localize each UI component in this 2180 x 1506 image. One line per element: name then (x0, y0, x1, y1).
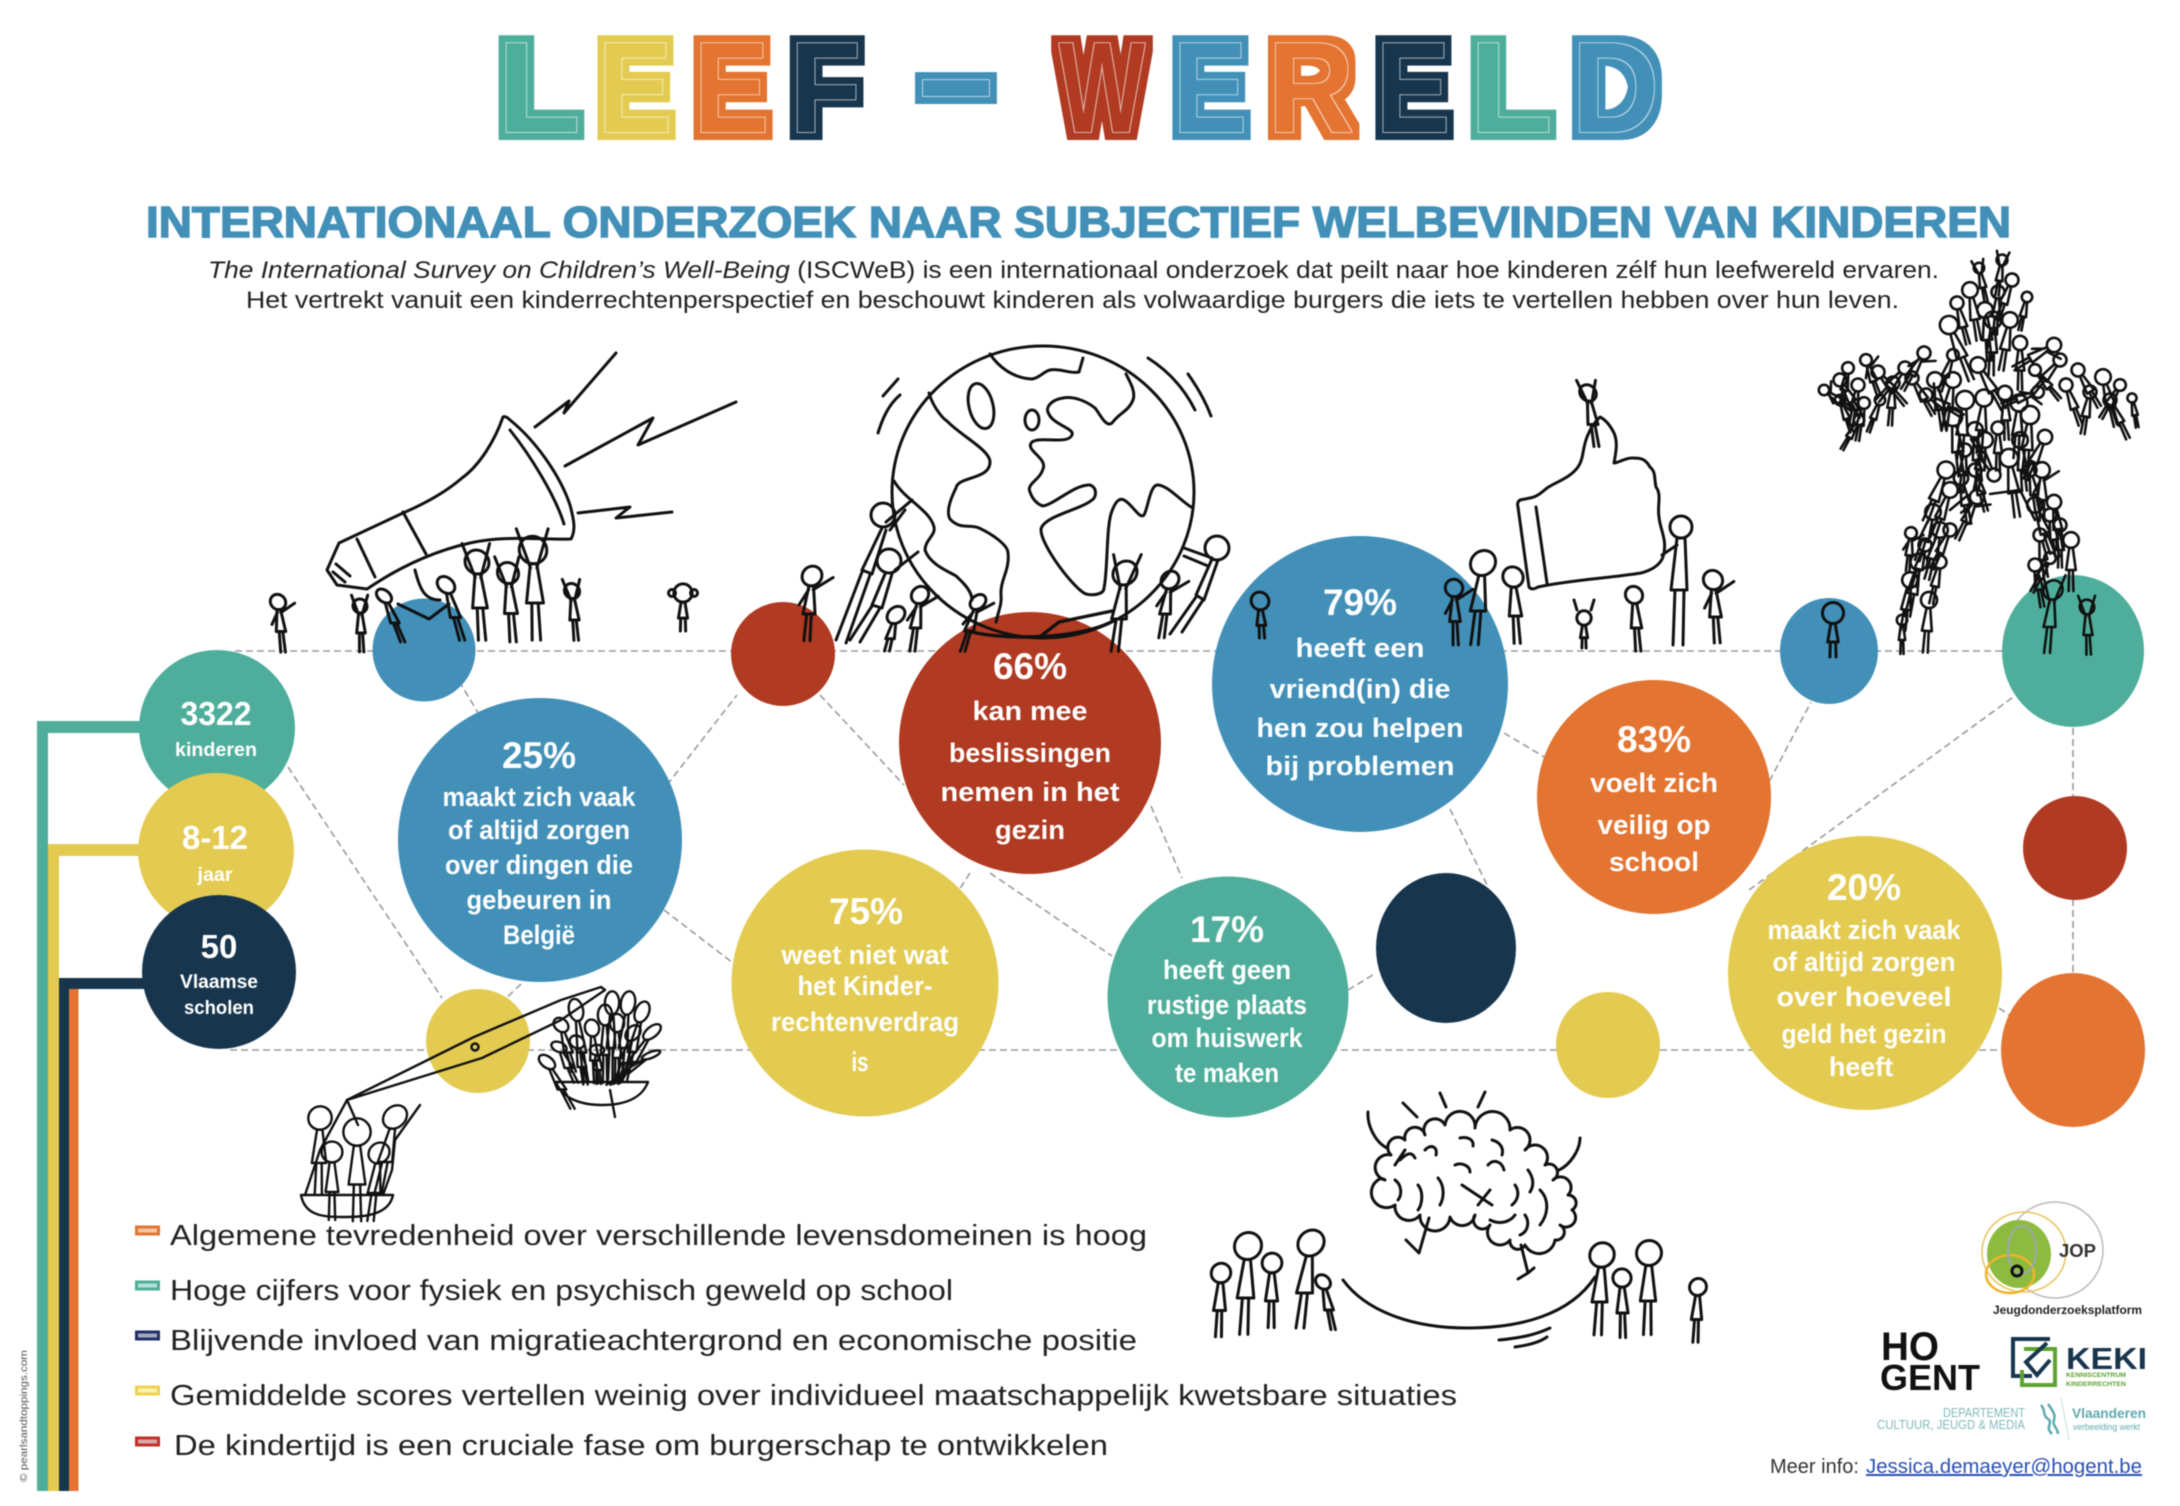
circle: 50 Vlaamse scholen: scholen (184, 998, 254, 1019)
circle: 3322 kinderen: 3322 (180, 695, 252, 732)
stat: 75%: weet niet wat (781, 940, 948, 970)
logo: Departement Cultuur Jeugd en Media: DEPARTEMENT (1943, 1405, 2025, 1420)
stat: 17% (1108, 876, 1348, 1118)
stat: 25%: of altijd zorgen (448, 815, 630, 845)
stat: 75%: rechtenverdrag (771, 1007, 959, 1037)
circle: 8-12 jaar: 8-12 (182, 819, 248, 856)
stat: 75% (732, 850, 998, 1116)
stat: 79%: bij problemen (1266, 751, 1454, 781)
stat: 17%: heeft geen (1163, 955, 1291, 985)
plain decorative dots (372, 575, 2145, 1127)
contact line: Jessica.demaeyer@hogent.be (1866, 1456, 2142, 1478)
illustration: megaphone with children (269, 353, 736, 652)
illustration: giant figure made of children (1817, 251, 2142, 655)
logo: KEKI: KINDERRECHTEN (2066, 1382, 2126, 1388)
stat: 25%: België (503, 920, 575, 950)
stat: 25% (398, 698, 682, 982)
stat: 17%: te maken (1175, 1058, 1279, 1088)
logo: KEKI (2013, 1339, 2147, 1388)
logo: Vlaanderen: Vlaanderen (2072, 1405, 2146, 1421)
logo: JOP: Jeugdonderzoeksplatform (1993, 1303, 2142, 1317)
title: E (1173, 16, 1247, 160)
stat: 66%: gezin (995, 815, 1065, 845)
stat: 83%: veilig op (1598, 810, 1710, 840)
stat: 20%: 20% (1827, 867, 1901, 908)
title: E (694, 16, 769, 160)
logo: KEKI: KEKI (2066, 1341, 2147, 1376)
legend item: geweld: Hoge cijfers voor fysiek en psychisch geweld op school (170, 1275, 953, 1307)
illustration: globe carried by children (796, 346, 1229, 651)
title: L (1470, 16, 1552, 160)
stat: 66%: nemen in het (940, 777, 1120, 807)
stat: 25%: maakt zich vaak (442, 782, 636, 812)
legend item: kindertijd: De kindertijd is een cruciale fase om burgerschap te ontwikkelen (174, 1430, 1108, 1462)
legend item: gemiddelde scores: Gemiddelde scores vertellen weinig over individueel maatschappelijk kwetsbare situaties (170, 1380, 1457, 1412)
stat: 66% (899, 612, 1161, 874)
stat: 75%: is (852, 1047, 868, 1077)
title: E (1376, 16, 1450, 160)
stat: 79%: vriend(in) die (1270, 674, 1450, 704)
legend item: tevredenheid: Algemene tevredenheid over verschillende levensdomeinen is hoog (170, 1220, 1147, 1252)
title: L (498, 16, 580, 160)
stat: 66%: 66% (993, 646, 1067, 687)
stat: 79%: heeft een (1296, 633, 1424, 663)
intro text: Het vertrekt vanuit een kinderrechtenperspectief en beschouwt kinderen als volwaardige burgers die iets te vertellen hebben over hun leven. (246, 287, 1899, 314)
stat: 20%: geld het gezin (1782, 1019, 1946, 1049)
stat: 83%: 83% (1617, 719, 1691, 760)
stat: 75%: het Kinder- (798, 971, 932, 1001)
stat: 83%: school (1609, 847, 1699, 877)
legend item: migratie: Blijvende invloed van migratieachtergrond en economische positie (170, 1325, 1137, 1357)
title: F (790, 16, 861, 160)
contact line: Meer info: (1770, 1456, 1859, 1478)
stat: 25%: gebeuren in (466, 885, 612, 915)
stat: 20%: of altijd zorgen (1772, 947, 1956, 977)
circle: 50 Vlaamse scholen: Vlaamse (180, 972, 258, 993)
circle: 50 Vlaamse scholen: 50 (201, 928, 237, 965)
logo: Vlaanderen (2041, 1398, 2146, 1440)
illustration: brain skipping rope (1209, 1092, 1707, 1347)
title: D (1572, 16, 1659, 160)
illustration: thumbs-up with children (1251, 380, 1844, 657)
stat: 17%: om huiswerk (1152, 1023, 1303, 1053)
circle: 50 Vlaamse scholen (142, 895, 296, 1049)
legend: conclusions (136, 1220, 1457, 1462)
stat: 25%: 25% (502, 735, 576, 776)
stat: 17%: rustige plaats (1147, 990, 1307, 1020)
stat: 20%: maakt zich vaak (1768, 915, 1961, 945)
stat: 79% (1212, 536, 1508, 832)
stat: 83%: voelt zich (1590, 768, 1718, 798)
circle: 8-12 jaar (138, 773, 294, 929)
stat: 79%: 79% (1323, 582, 1397, 623)
stat: 17%: 17% (1190, 909, 1264, 950)
left colour bars (37, 721, 148, 1491)
logo: HOGENT: HO (1881, 1325, 1939, 1369)
circle: 8-12 jaar: jaar (196, 865, 233, 886)
dashed connector network (230, 651, 2073, 1050)
stat: 83% (1537, 680, 1771, 914)
intro text: The International Survey on Children’s Well-Being (ISCWeB) is een internationaal onderzoek dat peilt naar hoe kinderen zélf hun leefwereld ervaren. (208, 257, 1939, 284)
logo: Departement Cultuur Jeugd en Media: CULTUUR, JEUGD & MEDIA (1877, 1417, 2025, 1432)
subtitle: INTERNATIONAAL ONDERZOEK NAAR SUBJECTIEF WELBEVINDEN VAN KINDEREN (146, 198, 2011, 247)
stat: 66%: kan mee (972, 696, 1088, 726)
stat: 20%: heeft (1829, 1052, 1893, 1082)
circle: 3322 kinderen: kinderen (175, 740, 257, 761)
logo: JOP (1982, 1202, 2142, 1317)
title (498, 0, 1659, 165)
stat: 66%: beslissingen (949, 738, 1111, 768)
stat: 75%: 75% (829, 891, 903, 932)
intro text (208, 257, 1939, 314)
stat: 79%: hen zou helpen (1256, 713, 1464, 743)
title: W (1059, 16, 1145, 160)
logo: Vlaanderen: verbeelding werkt (2073, 1422, 2140, 1432)
logo: Departement Cultuur Jeugd en Media (1877, 1405, 2025, 1432)
panel: study facts (138, 650, 296, 1049)
circle: 3322 kinderen (139, 650, 295, 806)
title: R (1268, 16, 1354, 160)
illustration: hanging baskets with children (301, 987, 664, 1221)
stat: 25%: over dingen die (445, 850, 633, 880)
copyright note: © pearlsandtoppings.com (18, 1350, 30, 1482)
logo: HOGENT: GENT (1880, 1357, 1980, 1398)
stat: 20%: over hoeveel (1776, 982, 1952, 1012)
title: E (598, 16, 672, 160)
logo: KEKI: KENNISCENTRUM (2066, 1373, 2126, 1379)
logo: JOP: JOP (2059, 1241, 2096, 1261)
stat: 20% (1728, 836, 2002, 1110)
logo: HOGENT (1880, 1325, 1980, 1398)
